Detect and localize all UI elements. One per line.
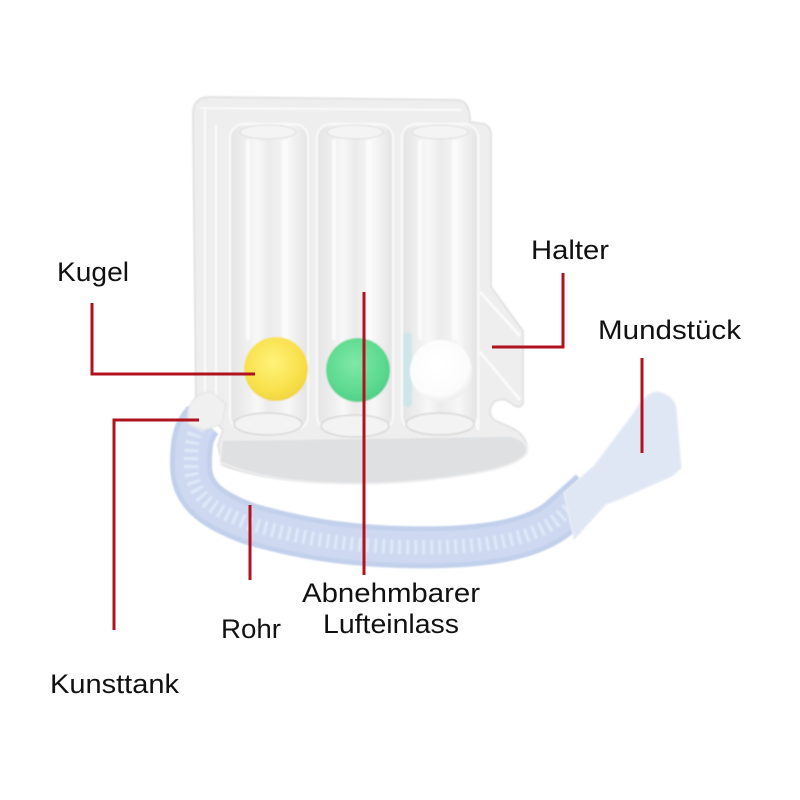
leader line: Rohr xyxy=(248,505,252,580)
leader line: Mundstück xyxy=(640,358,644,453)
leader line: Kugel xyxy=(92,303,255,374)
air inlet tint xyxy=(403,332,412,407)
panel ribs xyxy=(200,108,462,420)
spirometer device xyxy=(193,97,527,484)
label: Halter: Halter xyxy=(531,235,609,265)
label: Kunsttank: Kunsttank xyxy=(50,669,180,699)
yellow ball xyxy=(244,337,308,401)
label: Rohr: Rohr xyxy=(221,614,281,644)
white ball xyxy=(410,340,472,402)
base plate xyxy=(220,436,527,484)
label: Mundstück: Mundstück xyxy=(598,315,742,345)
label: Abnehmbarer Lufteinlass: Lufteinlass xyxy=(323,609,459,639)
mouthpiece xyxy=(564,392,681,539)
leader line: Abnehmbarer Lufteinlass xyxy=(362,292,366,575)
hose connector xyxy=(188,392,226,430)
label: Kugel: Kugel xyxy=(57,257,129,287)
holder bracket xyxy=(478,135,520,430)
label: Abnehmbarer Lufteinlass: Abnehmbarer xyxy=(302,578,480,608)
left cylinder xyxy=(230,124,308,435)
device back panel xyxy=(193,97,527,484)
leader line: Halter xyxy=(492,273,563,347)
corrugated hose xyxy=(191,420,590,547)
green ball xyxy=(326,338,390,402)
middle cylinder xyxy=(317,124,393,437)
leader line: Kunsttank xyxy=(114,420,199,630)
label: Abnehmbarer Lufteinlass xyxy=(302,578,480,639)
right cylinder xyxy=(402,124,478,435)
